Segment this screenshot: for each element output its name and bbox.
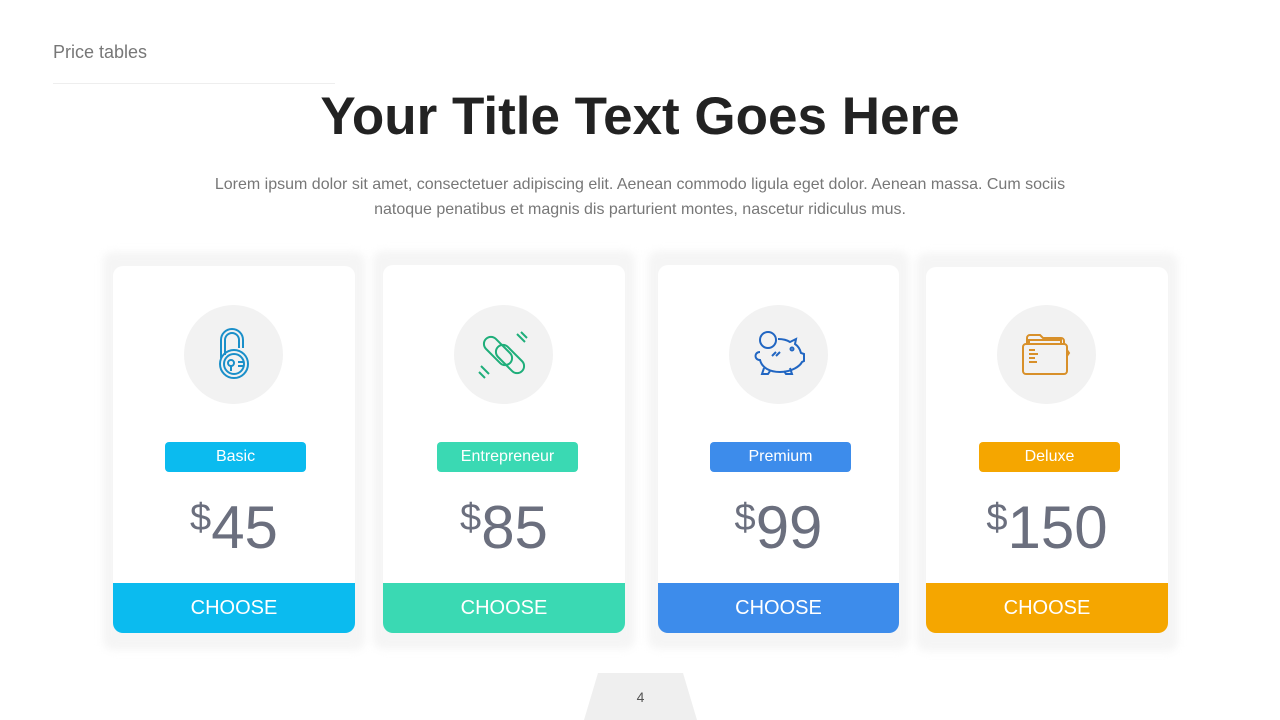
panel: premium xyxy=(658,265,899,633)
icon: folder xyxy=(997,305,1096,404)
price: $85 xyxy=(460,494,548,561)
button xyxy=(383,583,625,633)
badge xyxy=(979,442,1120,472)
title: Your Title Text Goes Here xyxy=(320,87,960,146)
section label: Price tables xyxy=(53,42,147,62)
panel: entrepreneur xyxy=(383,265,625,633)
button xyxy=(658,583,899,633)
subtitle: Lorem ipsum dolor sit amet, consectetuer adipiscing elit. Aenean commodo ligula eget dolor. Aenean massa. Cum sociis natoque penatibus et magnis dis parturient montes, nascetur ridiculus mus. xyxy=(215,176,1065,218)
icon: piggy bank xyxy=(729,305,828,404)
page number tab: 4 xyxy=(637,689,644,705)
page number tab xyxy=(584,673,697,720)
button: CHOOSE xyxy=(1004,597,1090,619)
panel: deluxe xyxy=(926,267,1168,633)
badge xyxy=(437,442,578,472)
panel: basic xyxy=(113,266,355,633)
badge xyxy=(165,442,306,472)
badge xyxy=(710,442,851,472)
badge: Basic xyxy=(216,448,255,465)
button: CHOOSE xyxy=(735,597,822,619)
badge: Premium xyxy=(748,448,812,465)
icon: chain link xyxy=(454,305,553,404)
button: CHOOSE xyxy=(191,597,277,619)
price: $45 xyxy=(190,494,278,561)
price: $99 xyxy=(735,494,822,561)
button xyxy=(926,583,1168,633)
button xyxy=(113,583,355,633)
badge: Entrepreneur xyxy=(461,448,554,465)
price: $150 xyxy=(986,494,1108,561)
button: CHOOSE xyxy=(461,597,547,619)
badge: Deluxe xyxy=(1025,448,1074,465)
icon: padlock xyxy=(184,305,283,404)
